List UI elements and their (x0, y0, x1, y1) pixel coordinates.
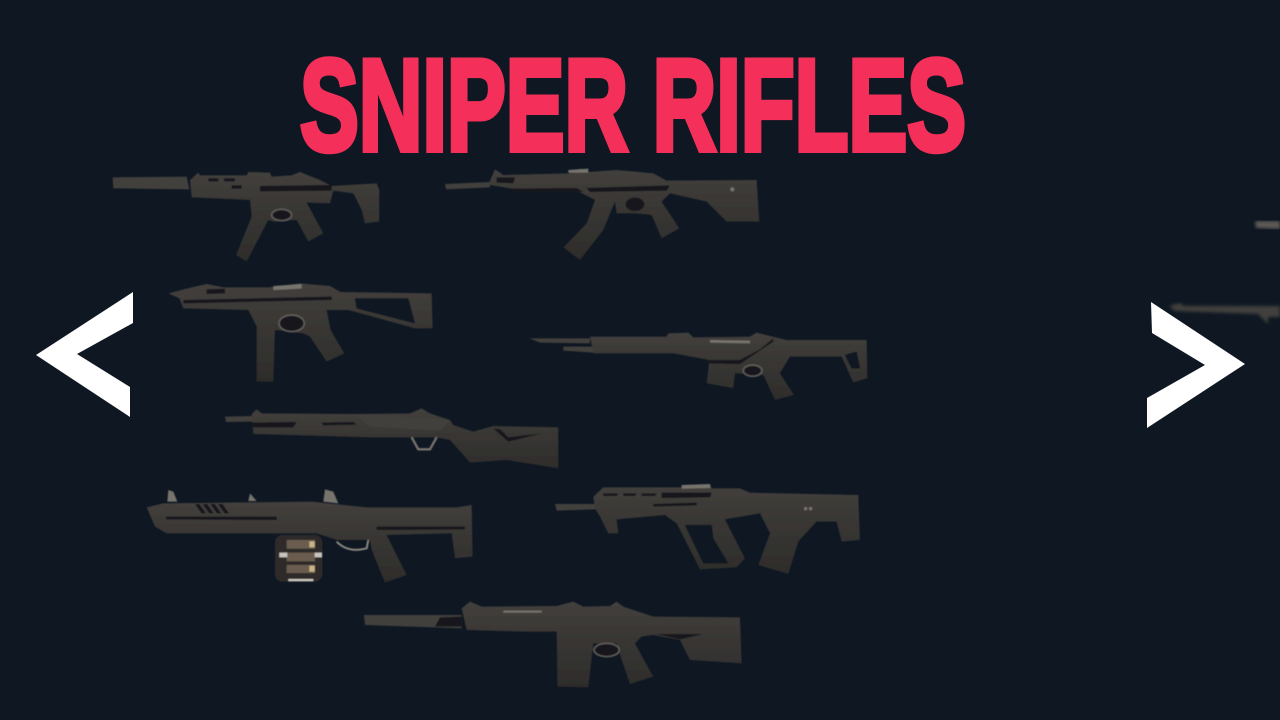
title: SNIPER RIFLES (300, 32, 966, 178)
arrow: next (1147, 302, 1245, 428)
weapon: bullpup rifle (555, 484, 860, 574)
weapon: shotgun with wooden-style stock (225, 408, 558, 468)
weapon: drum-fed shotgun (147, 489, 473, 583)
weapon: suppressed rifle (364, 602, 742, 687)
weapon: assault rifle with curved magazine (445, 169, 759, 260)
weapon: folding-stock SMG (168, 283, 433, 382)
arrow: previous (36, 292, 133, 417)
weapon: suppressed SMG (113, 172, 379, 262)
weapon: long rifle with folding stock (529, 333, 867, 400)
weapon: partial rifle at right edge (middle) (1169, 303, 1280, 324)
weapon: partial rifle at right edge (top) (1255, 221, 1280, 229)
